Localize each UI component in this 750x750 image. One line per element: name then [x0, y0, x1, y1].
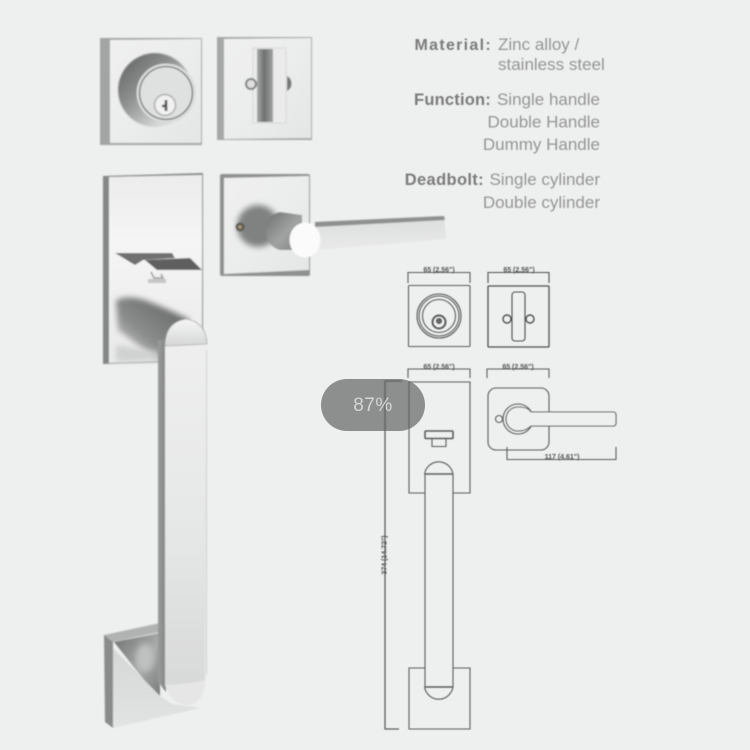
- photo: thumbturn interior plate: [217, 37, 312, 140]
- photo: lever rose plate: [220, 174, 446, 276]
- progress badge: [321, 379, 425, 431]
- dimension: overall height: [382, 381, 402, 729]
- technical drawing: full handle set: 65 (2.56"): [423, 364, 455, 371]
- technical drawing: deadbolt front: 65 (2.56"): [423, 267, 455, 274]
- technical drawing: full handle set: [382, 364, 470, 729]
- progress badge: 87%: [353, 395, 393, 416]
- photo: deadbolt exterior plate: [100, 38, 202, 145]
- deadbolt specification: Deadbolt:: [405, 171, 484, 189]
- deadbolt specification: [405, 170, 600, 212]
- material specification: Material:: [414, 37, 492, 54]
- function specification: Function:: [414, 91, 491, 109]
- specification list: [405, 35, 605, 212]
- photo: handle bottom plate: [104, 623, 200, 728]
- technical drawing: thumbturn front: 65 (2.56"): [503, 267, 535, 274]
- function specification: [414, 90, 600, 154]
- deadbolt specification: Double cylinder: [483, 193, 600, 212]
- deadbolt specification: Single cylinder: [489, 170, 600, 189]
- photo: handle escutcheon: [103, 173, 203, 364]
- technical drawing: lever front: 65 (2.56"): [502, 364, 534, 371]
- material specification: Zinc alloy /: [498, 35, 580, 54]
- material specification: [414, 35, 605, 74]
- photo: grip handle: [158, 319, 207, 705]
- dimension: overall height: 374 (14.72"): [382, 535, 388, 575]
- function specification: Single handle: [497, 90, 600, 109]
- function specification: Double Handle: [488, 112, 600, 132]
- function specification: Dummy Handle: [483, 135, 600, 154]
- technical drawing: thumbturn front: [488, 267, 549, 347]
- icon: thumb latch: [115, 253, 202, 283]
- handle cast shadow: [116, 297, 190, 362]
- icon: lever handle: [266, 212, 446, 258]
- icon: deadbolt cylinder: [118, 53, 195, 127]
- material specification: stainless steel: [498, 55, 605, 74]
- technical drawing: lever front: 117 (4.61"): [545, 454, 579, 461]
- technical drawing: deadbolt front: [408, 267, 470, 346]
- technical drawing: lever front: [487, 364, 616, 461]
